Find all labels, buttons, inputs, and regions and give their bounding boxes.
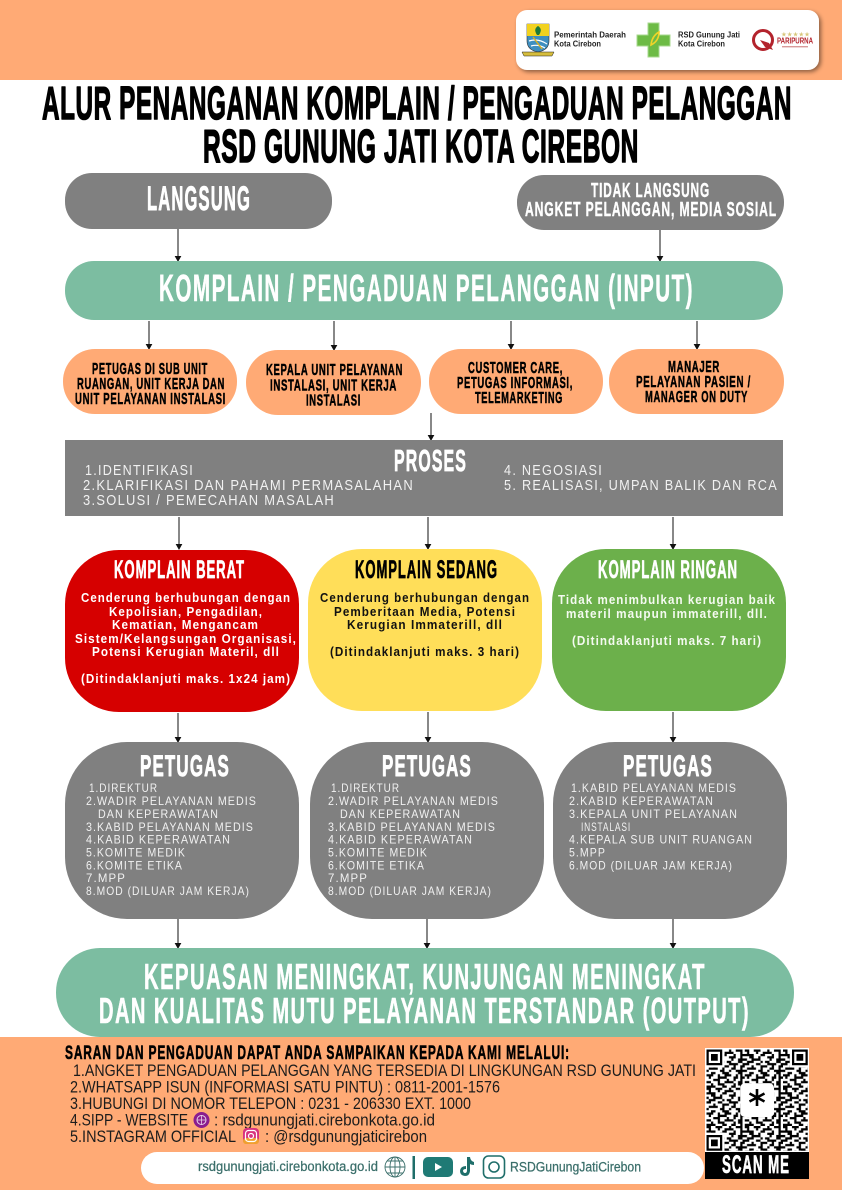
list: 3.KEPALA UNIT PELAYANAN: [569, 807, 738, 821]
body: Sistem/Kelangsungan Organisasi,: [75, 632, 297, 646]
text: RSD Gunung Jati: RSD Gunung Jati: [678, 30, 740, 40]
footer band: [0, 1037, 842, 1190]
list: contact channels: 2.WHATSAPP ISUN (INFORMASI SATU PINTU) : 0811-2001-1576: [70, 1078, 500, 1096]
pill: kepala unit: INSTALASI, UNIT KERJA: [270, 378, 397, 394]
text: Pemerintah Daerah: Kota Cirebon: [554, 40, 601, 48]
heading: PETUGAS: [382, 750, 472, 783]
pill: langsung: LANGSUNG: [147, 180, 251, 218]
text: website: rsdgunungjati.cirebonkota.go.id: [198, 1159, 378, 1174]
title: [42, 77, 792, 172]
list: contact channels: [70, 1061, 696, 1146]
arrow: [670, 919, 676, 948]
panel: output: [56, 948, 794, 1037]
list: proses right: [504, 462, 778, 494]
divider: [412, 1156, 415, 1179]
pill: petugas sub unit: PETUGAS DI SUB UNIT: [92, 361, 208, 378]
icon: Paripurna logo: ★★★★★: [781, 30, 810, 38]
icon: Paripurna logo: [754, 30, 813, 50]
list: proses right: 5. REALISASI, UMPAN BALIK DAN RCA: [504, 477, 778, 494]
arrow: [694, 321, 700, 349]
pill: manajer: MANAGER ON DUTY: [645, 389, 748, 406]
body: [75, 591, 297, 686]
arrow: [670, 712, 676, 742]
list: proses right: 4. NEGOSIASI: [504, 462, 603, 479]
list: [328, 781, 499, 898]
body: [320, 591, 530, 659]
list: 5.KOMITE MEDIK: [328, 846, 428, 860]
arrow: [670, 517, 676, 549]
arrow: [658, 230, 662, 261]
pill: tidak langsung: TIDAK LANGSUNG: [591, 180, 710, 202]
pill: manajer: [609, 349, 784, 414]
body: [558, 593, 776, 648]
body: Kematian, Mengancam: [112, 618, 259, 632]
panel: petugas berat: [65, 742, 299, 919]
arrow: [424, 919, 430, 948]
heading: PETUGAS: [140, 750, 230, 783]
text: handle: RSDGunungJatiCirebon: [510, 1160, 641, 1174]
panel: komplain berat: [65, 550, 299, 712]
list: contact channels: 1.ANGKET PENGADUAN PELANGGAN YANG TERSEDIA DI LINGKUNGAN RSD GUNUNG JATI: [73, 1061, 696, 1080]
pill: manajer: MANAJER: [668, 359, 720, 376]
list: 1.KABID PELAYANAN MEDIS: [571, 781, 737, 795]
icon: Paripurna logo: PARIPURNA: [777, 36, 813, 46]
arrow: [176, 229, 180, 261]
list: proses left: [83, 462, 414, 509]
panel: komplain sedang: [308, 549, 542, 711]
icon: Kota Cirebon crest: [522, 24, 554, 56]
list: contact channels: : rsdgunungjati.cirebonkota.go.id: [214, 1110, 435, 1130]
pill: petugas sub unit: RUANGAN, UNIT KERJA DAN: [77, 376, 225, 393]
icon: globe: [385, 1157, 405, 1177]
list: 8.MOD (DILUAR JAM KERJA): [328, 884, 492, 898]
heading: KOMPLAIN BERAT: [114, 556, 245, 584]
logo card: [516, 10, 819, 70]
panel: input: [65, 261, 783, 320]
body: (Ditindaklanjuti maks. 3 hari): [330, 645, 520, 659]
panel: petugas ringan: [553, 742, 787, 919]
body: (Ditindaklanjuti maks. 1x24 jam): [81, 672, 291, 686]
panel: proses: [65, 440, 783, 516]
arrow: [426, 517, 430, 549]
body: Potensi Kerugian Materil, dll: [92, 645, 280, 659]
heading: PETUGAS: [623, 750, 713, 783]
list: 4.KEPALA SUB UNIT RUANGAN: [569, 832, 753, 846]
arrow: [146, 321, 152, 349]
panel: petugas sedang: [310, 742, 544, 919]
list: 1.DIREKTUR: [89, 781, 158, 795]
QR code: [705, 1048, 809, 1152]
label: scan me: [705, 1151, 809, 1179]
pill: langsung: [65, 173, 332, 229]
list: 2.KABID KEPERAWATAN: [569, 794, 714, 808]
list: 2.WADIR PELAYANAN MEDIS: [328, 794, 499, 808]
list: contact channels: 5.INSTAGRAM OFFICIAL: [70, 1127, 236, 1146]
arrow: [428, 413, 434, 440]
body: Tidak menimbulkan kerugian baik: [558, 593, 776, 607]
icon: instagram: [243, 1128, 259, 1144]
list: 7.MPP: [86, 871, 126, 885]
icon: website globe: [194, 1112, 210, 1128]
pill: customer care: TELEMARKETING: [475, 390, 563, 407]
list: 4.KABID KEPERAWATAN: [328, 832, 473, 846]
heading: KOMPLAIN SEDANG: [355, 556, 498, 584]
body: Pemberitaan Media, Potensi: [334, 605, 516, 619]
list: 5.KOMITE MEDIK: [86, 846, 186, 860]
list: 6.KOMITE ETIKA: [328, 858, 425, 872]
list: [569, 781, 753, 872]
icon: green cross: [637, 23, 670, 57]
arrow: [176, 713, 180, 742]
list: 6.MOD (DILUAR JAM KERJA): [569, 858, 733, 872]
icon: tiktok: [460, 1157, 474, 1176]
text: Pemerintah Daerah: [554, 30, 626, 48]
list: INSTALASI: [581, 820, 631, 834]
text: Pemerintah Daerah: Pemerintah Daerah: [554, 30, 626, 40]
pill: kepala unit: INSTALASI: [306, 392, 361, 410]
list: DAN KEPERAWATAN: [340, 807, 461, 821]
arrow: [508, 321, 514, 349]
body: Kepolisian, Pengadilan,: [109, 605, 263, 619]
pill: customer care: CUSTOMER CARE,: [468, 360, 563, 377]
pill: customer care: [429, 349, 603, 414]
body: Cenderung berhubungan dengan: [81, 591, 291, 605]
list: 5.MPP: [569, 846, 606, 860]
body: materil maupun immaterill, dll.: [566, 607, 768, 621]
list: proses left: 1.IDENTIFIKASI: [85, 462, 194, 479]
list: contact channels: : @rsdgunungjaticirebon: [265, 1127, 427, 1146]
list: 7.MPP: [328, 871, 368, 885]
list: 2.WADIR PELAYANAN MEDIS: [86, 794, 257, 808]
list: proses left: 2.KLARIFIKASI DAN PAHAMI PERMASALAHAN: [83, 477, 414, 494]
arrow: [332, 321, 336, 350]
list: [86, 781, 257, 898]
body: Kerugian Immaterill, dll: [347, 618, 503, 632]
pill: kepala unit: [246, 350, 421, 415]
body: (Ditindaklanjuti maks. 7 hari): [572, 634, 762, 648]
list: 6.KOMITE ETIKA: [86, 858, 183, 872]
list: 3.KABID PELAYANAN MEDIS: [328, 820, 496, 834]
text: RSD Gunung Jati: [678, 30, 740, 48]
pill: petugas sub unit: [63, 349, 237, 414]
arrow: [426, 712, 430, 742]
list: contact channels: 4.SIPP - WEBSITE: [70, 1110, 188, 1130]
list: contact channels: 3.HUBUNGI DI NOMOR TELEPON : 0231 - 206330 EXT. 1000: [70, 1094, 471, 1113]
arrow: [176, 517, 182, 549]
pill: customer care: PETUGAS INFORMASI,: [457, 375, 573, 392]
icon: youtube: [423, 1157, 453, 1177]
pill: social links: [141, 1152, 704, 1184]
list: proses left: 3.SOLUSI / PEMECAHAN MASALAH: [83, 492, 335, 509]
pill: petugas sub unit: UNIT PELAYANAN INSTALASI: [75, 391, 226, 408]
text: RSD Gunung Jati: Kota Cirebon: [678, 40, 725, 48]
list: 1.DIREKTUR: [331, 781, 400, 795]
icon: instagram outline: [484, 1156, 504, 1178]
heading: proses: PROSES: [394, 443, 467, 478]
arrow: [176, 919, 180, 948]
pill: tidak langsung: [517, 175, 784, 230]
pill: kepala unit: KEPALA UNIT PELAYANAN: [266, 362, 403, 379]
header band: [0, 0, 842, 80]
list: 4.KABID KEPERAWATAN: [86, 832, 231, 846]
list: 8.MOD (DILUAR JAM KERJA): [86, 884, 250, 898]
list: DAN KEPERAWATAN: [98, 807, 219, 821]
panel: komplain ringan: [552, 549, 786, 711]
list: 3.KABID PELAYANAN MEDIS: [86, 820, 254, 834]
pill: manajer: PELAYANAN PASIEN /: [636, 374, 751, 391]
body: Cenderung berhubungan dengan: [320, 591, 530, 605]
